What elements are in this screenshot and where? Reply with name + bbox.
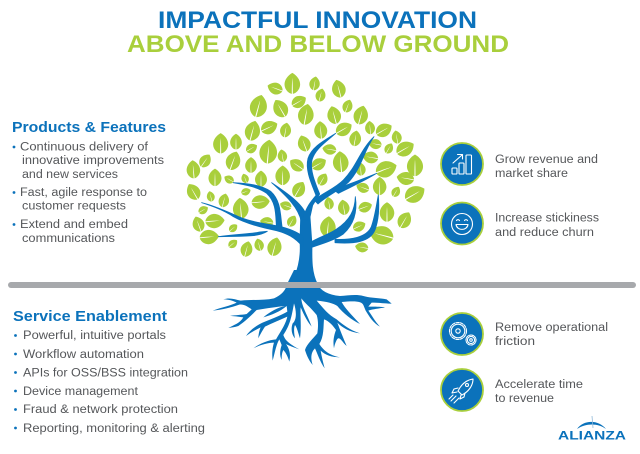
tree leaves [183,73,428,258]
heading: products and features: Products & Features [12,119,166,136]
label: accelerate time to revenue [495,379,583,405]
bullet list: service enablement [14,330,205,435]
bullet list: products and features: innovative improvements [22,155,164,167]
bullet list: products and features: Extend and embed [20,219,128,231]
bullet list: products and features: and new services [22,169,118,181]
label: remove friction [495,322,608,348]
benefit: accelerate time to revenue [441,369,583,411]
bullet list: service enablement: APIs for OSS/BSS integration [23,368,188,380]
bullet list: products and features: communications [22,233,115,245]
logo: alianza: ALIANZA [558,428,626,442]
label: increase stickiness: and reduce churn [495,227,594,239]
tree roots [213,270,392,368]
benefit: increase stickiness [441,202,599,244]
logo: alianza [558,416,626,442]
label: grow revenue [495,154,598,180]
label: accelerate time to revenue: Accelerate time [495,379,583,391]
panel: products and features [12,119,166,245]
ground line [8,282,636,288]
label: accelerate time to revenue: to revenue [495,393,554,405]
bullet list: service enablement: Reporting, monitoring & alerting [23,423,205,435]
label: remove friction: Remove operational [495,322,608,334]
tree [183,73,428,284]
label: grow revenue: market share [495,168,568,180]
label: remove friction: friction [495,336,535,348]
benefit: grow revenue [441,143,598,185]
bullet list: products and features: Continuous delivery of [20,142,149,154]
label: increase stickiness: Increase stickiness [495,212,599,224]
bullet list: service enablement: Powerful, intuitive portals [23,330,166,342]
panel: service enablement [13,308,205,435]
icon: growth chart [441,143,483,185]
title: ABOVE AND BELOW GROUND [127,31,509,58]
bullet list: service enablement: Device management [23,386,139,398]
icon: rocket [441,369,483,411]
title [127,7,509,58]
label: grow revenue: Grow revenue and [495,154,598,166]
bullet list: products and features: customer requests [22,200,126,212]
bullet list: service enablement: Fraud & network protection [23,404,178,416]
icon: gears [441,313,483,355]
bullet list: products and features: Fast, agile response to [20,187,147,199]
heading: service enablement: Service Enablement [13,308,167,325]
tree trunk and branches [202,133,379,284]
icon: smiling face [441,202,483,244]
title: IMPACTFUL INNOVATION [158,7,477,34]
bullet list: service enablement: Workflow automation [23,349,144,361]
bullet list: products and features [13,142,164,245]
label: increase stickiness [495,212,599,239]
benefit: remove friction [441,313,608,355]
